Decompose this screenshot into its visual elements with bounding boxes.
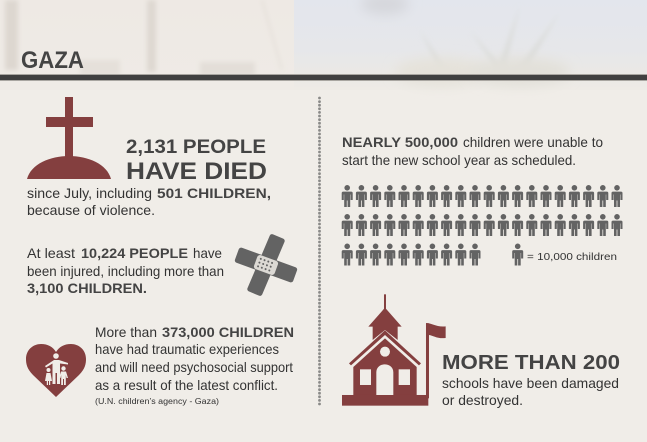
text: traumatic experiences: More than [95,324,157,340]
text: traumatic experiences [95,324,294,406]
legend: one figure equals 10,000 children [512,244,617,266]
text: school year: children were unable to [463,134,603,150]
icon: damaged school [342,294,446,406]
source note: (U.N. children’s agency - Gaza) [95,397,219,406]
icon: grave with cross [27,97,111,179]
icon: heart with family [26,344,86,397]
text: injured [27,245,224,296]
text: injured: At least [27,245,75,261]
title: GAZA [21,47,84,74]
dotted divider [318,98,321,405]
text: deaths detail: 501 CHILDREN, [157,185,271,201]
icon: crossed bandages [234,233,298,297]
heading: people died: 2,131 PEOPLE [126,136,266,158]
text: schools damaged: or destroyed. [442,392,523,408]
text: traumatic experiences: and will need psychosocial support [95,359,293,375]
text: traumatic experiences: 373,000 CHILDREN [162,324,294,340]
text: injured: 10,224 PEOPLE [81,245,188,261]
heading: people died: HAVE DIED [126,158,267,185]
text: deaths detail: because of violence. [27,202,155,218]
pictogram: children unable to start school [342,185,622,266]
heading: more than 200: MORE THAN 200 [442,351,620,374]
text: school year: NEARLY 500,000 [342,134,458,150]
text: traumatic experiences: as a result of the latest conflict. [95,377,278,393]
background photo: faded buildings and palms [0,0,647,90]
text: injured: have [193,245,222,261]
text: deaths detail: since July, including [27,185,152,201]
text: school year: start the new school year as scheduled. [342,152,576,168]
text: injured: been injured, including more than [27,263,224,279]
text: injured: 3,100 CHILDREN. [27,280,147,296]
heading: people died [126,136,267,185]
text: deaths detail [27,185,271,218]
text: schools damaged [442,375,619,408]
text: traumatic experiences: have had traumatic experiences [95,341,279,357]
legend: one figure equals 10,000 children: = 10,000 children [527,251,617,263]
text: schools damaged: schools have been damaged [442,375,619,391]
header rule [0,74,647,81]
text: school year [342,134,603,168]
